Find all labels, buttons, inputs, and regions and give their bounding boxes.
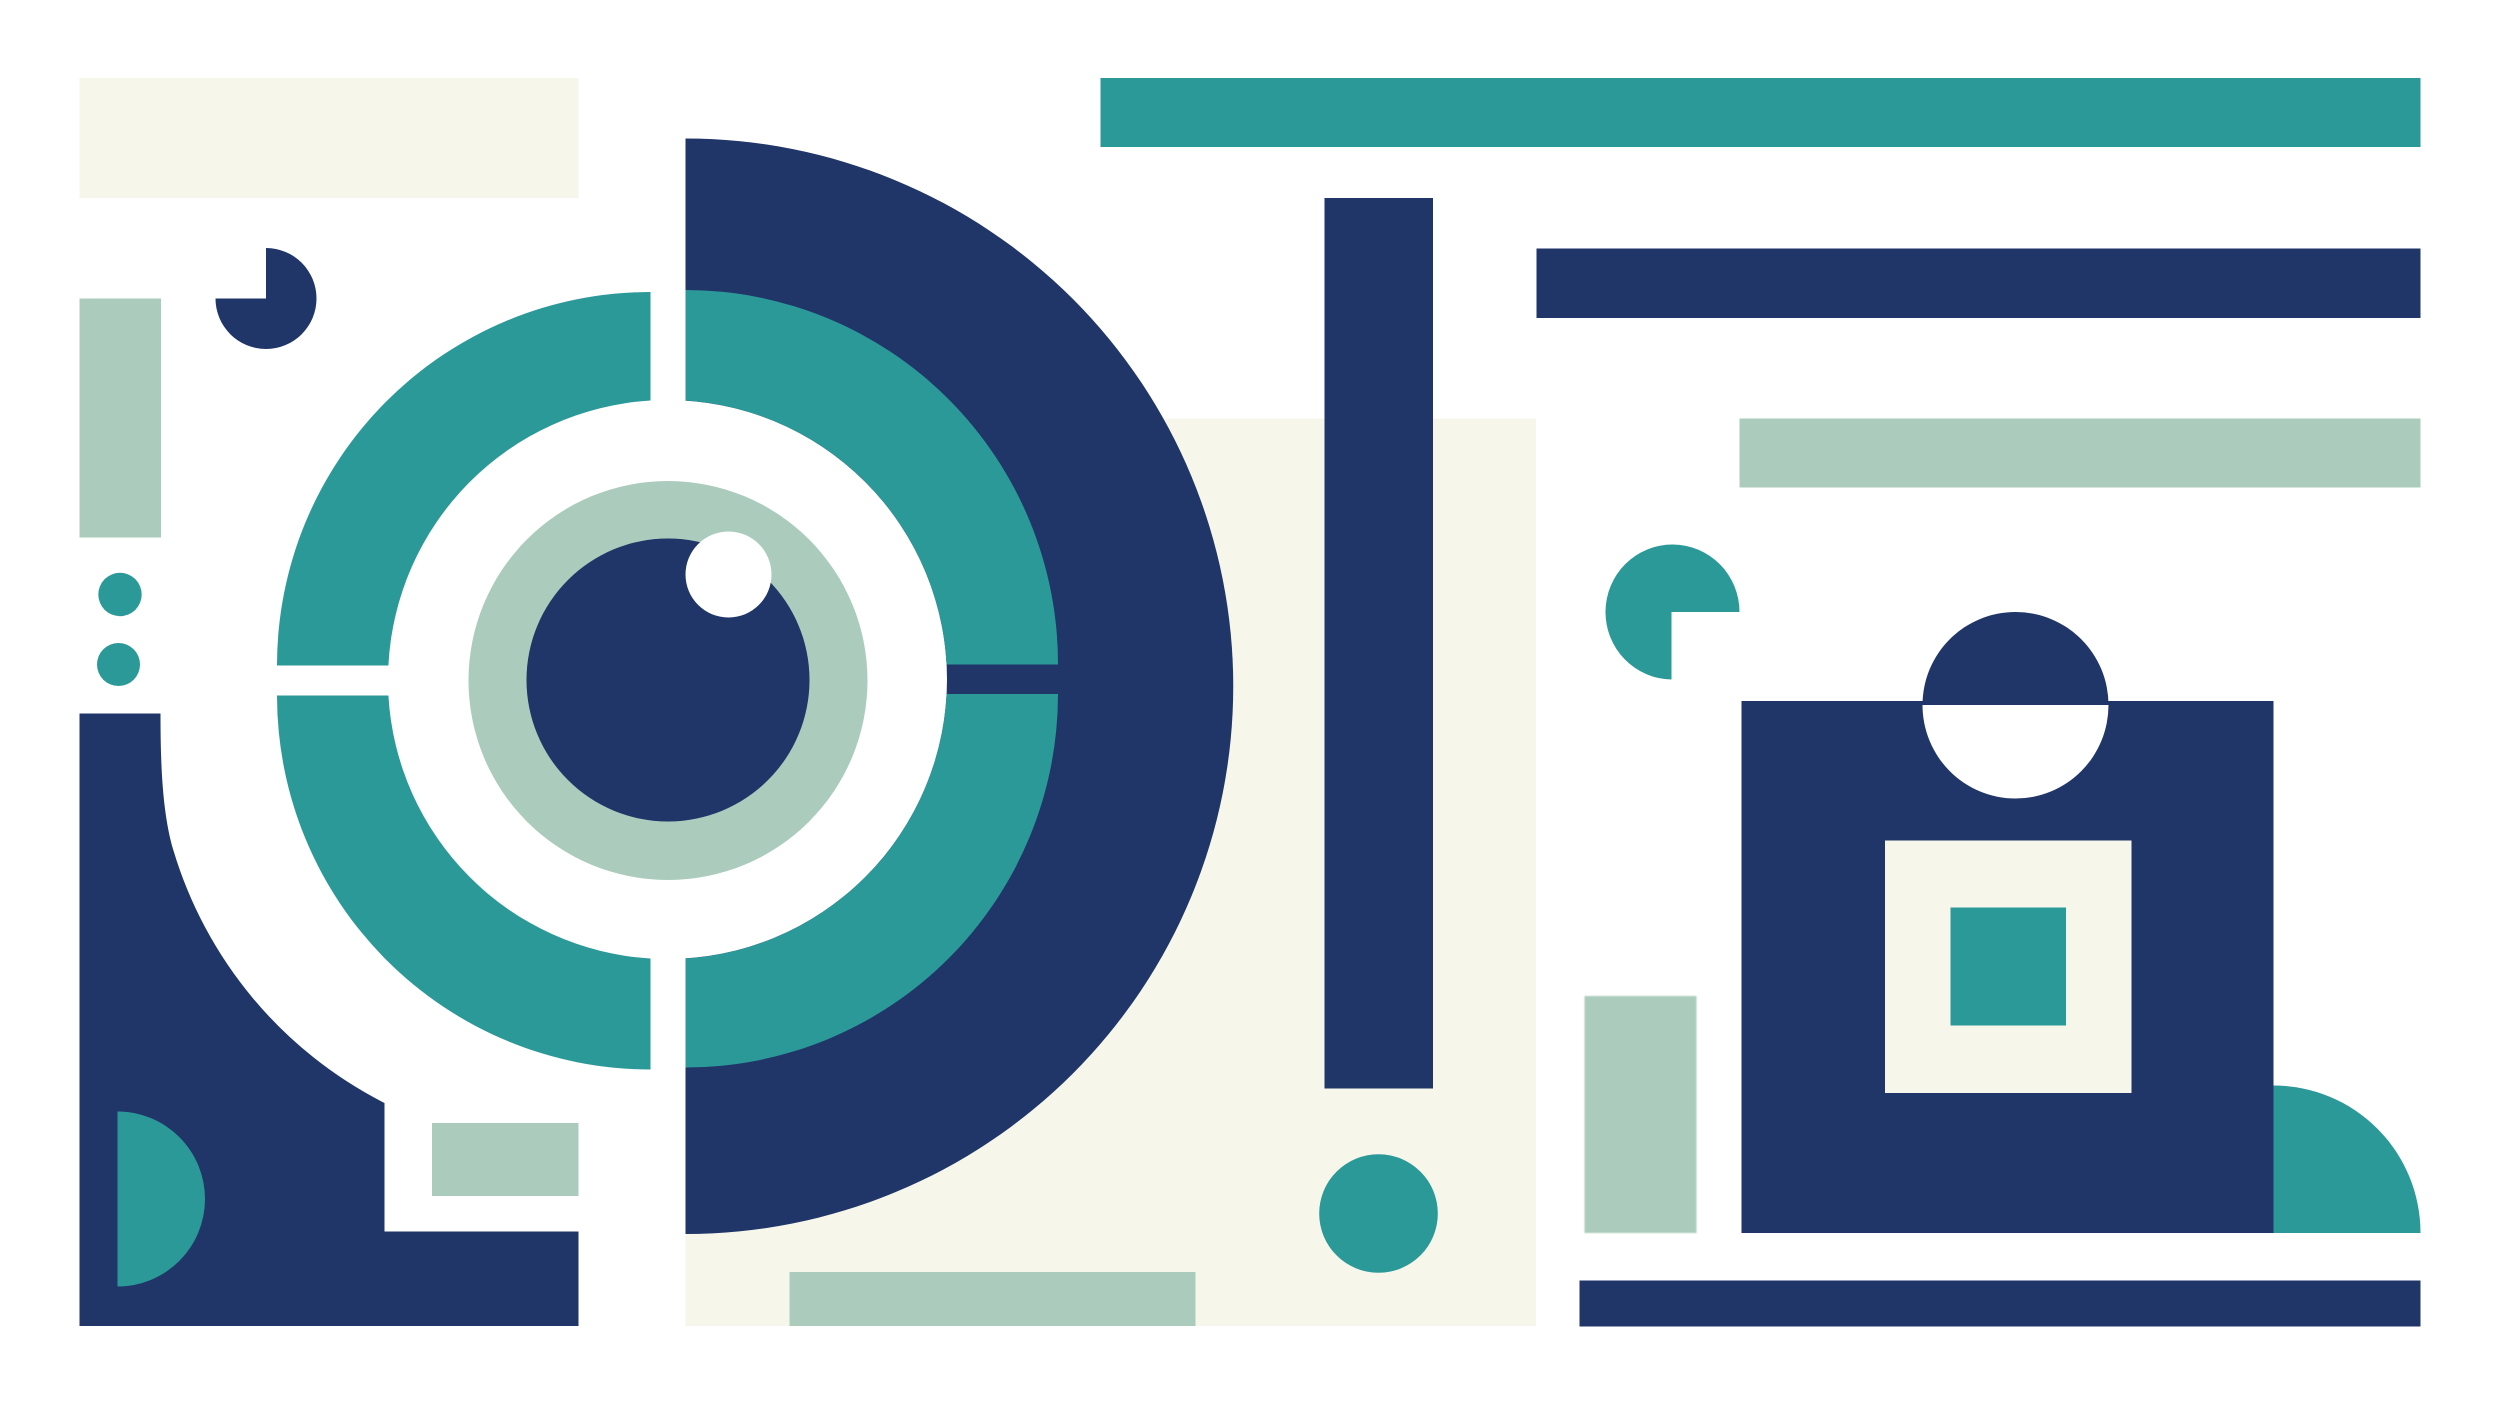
teal ring segment top right (686, 290, 1058, 664)
navy large half circle (686, 138, 1233, 1234)
navy vertical bar (1324, 198, 1433, 1088)
sage blurred vertical rectangle (1584, 996, 1696, 1233)
sage bottom bar (790, 1272, 1196, 1326)
navy pupil (526, 538, 810, 822)
teal ring segment top left (277, 292, 650, 666)
cream rectangle top left (80, 78, 578, 198)
teal inner square (1950, 908, 2066, 1026)
teal ring segment bottom left (277, 696, 650, 1070)
navy square (1742, 701, 2274, 1233)
panel: left column shapes (80, 78, 578, 686)
navy curved block (80, 714, 578, 1326)
navy top half circle (1922, 612, 2108, 705)
white disc inside ring (388, 400, 947, 959)
navy bottom bar (1580, 1280, 2420, 1326)
teal dot upper (98, 573, 142, 616)
sage iris ring (468, 481, 868, 880)
navy bar (1536, 248, 2420, 318)
teal circle under bar (1319, 1154, 1438, 1273)
sage vertical bar (80, 298, 161, 538)
panel: bottom left navy shape (80, 714, 578, 1326)
white bottom half circle (1922, 705, 2108, 799)
teal half circle (118, 1112, 205, 1286)
sage small rectangle (432, 1123, 578, 1196)
sage bar (1740, 418, 2420, 488)
teal dot lower (97, 643, 140, 686)
icon: teal pie with missing quadrant (1605, 545, 1740, 680)
panel: top right bars (1100, 78, 2420, 488)
cream large rectangle (686, 418, 1536, 1326)
teal bar (1100, 78, 2420, 147)
cream inner square (1885, 840, 2132, 1093)
white highlight (686, 532, 772, 618)
icon: navy pie with missing quadrant (216, 248, 316, 349)
panel: eye rings (277, 290, 1058, 1070)
teal ring segment bottom right (686, 694, 1058, 1068)
teal quarter circle (2274, 1086, 2420, 1233)
panel: cream backdrop with sage bar (686, 418, 1536, 1326)
panel: navy square composition (1742, 612, 2420, 1233)
